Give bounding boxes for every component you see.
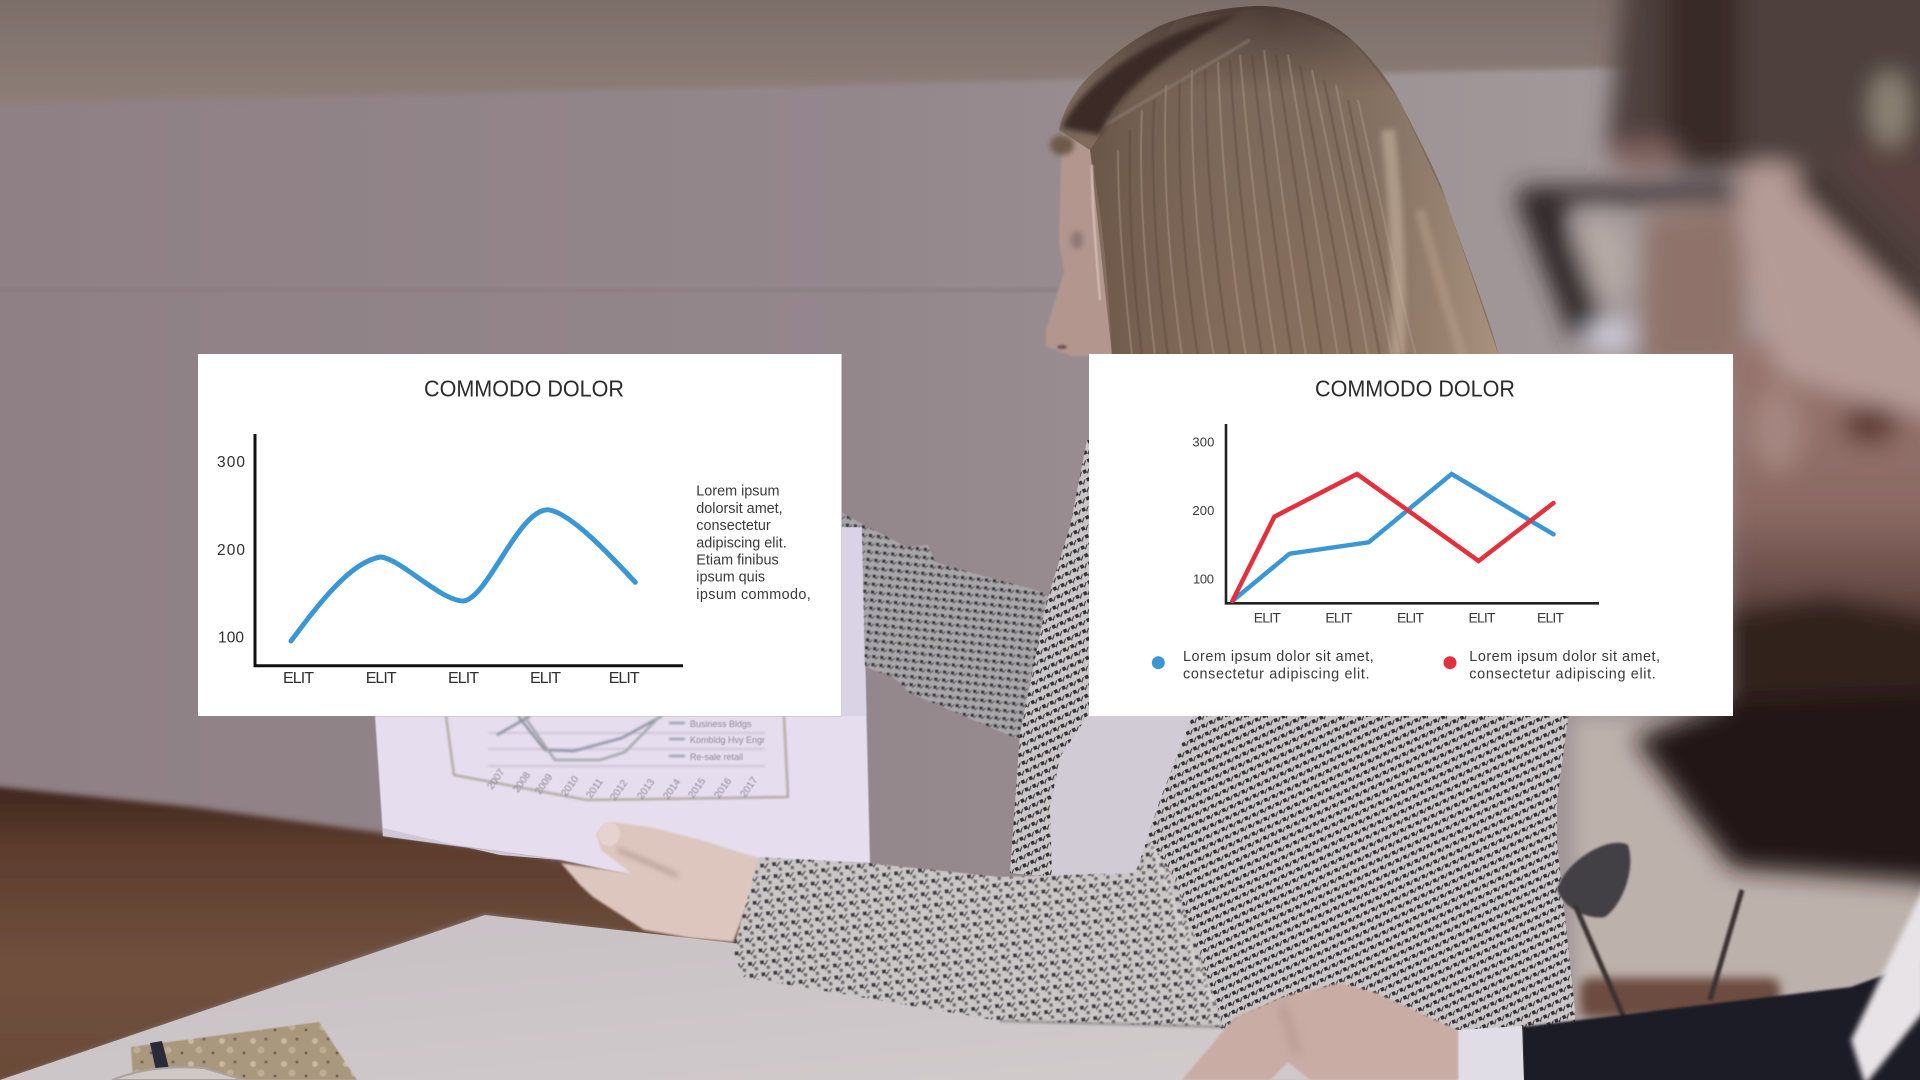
x axis labels: ELIT <box>530 670 561 687</box>
notebook <box>112 1022 357 1080</box>
woman's hand <box>561 822 765 942</box>
woman's white shirt <box>1050 712 1200 882</box>
blue line series <box>1232 474 1554 601</box>
x axis labels: ELIT <box>366 670 397 687</box>
hair parting <box>1105 40 1250 125</box>
paper chart legend <box>690 719 765 762</box>
description text: consectetur <box>696 518 771 534</box>
glasses frame <box>1520 192 1740 196</box>
man's shirt collar <box>1851 885 1920 1080</box>
legend: blue: consectetur adipiscing elit. <box>1183 667 1370 683</box>
man's hand <box>1182 983 1458 1080</box>
x axis labels: ELIT <box>609 670 640 687</box>
blonde highlight <box>1388 130 1399 356</box>
legend: red: consectetur adipiscing elit. <box>1469 667 1656 683</box>
blue smooth line <box>291 510 635 641</box>
description text <box>696 484 811 603</box>
paper chart legend: Business Bldgs <box>690 719 752 729</box>
glasses arm <box>1800 178 1920 340</box>
wooden sideboard <box>0 786 760 1080</box>
paper document <box>375 527 870 875</box>
y axis labels: 200 <box>217 542 245 559</box>
wall seam <box>0 288 1100 292</box>
woman's jacket: body <box>1141 712 1575 1030</box>
paper chart years: 2016 <box>712 776 734 801</box>
woman's jacket: upper arm <box>842 513 1060 745</box>
x axis labels: ELIT <box>283 670 314 687</box>
man's blurred head <box>1515 0 1920 885</box>
legend: blue <box>1152 649 1374 683</box>
legend: blue: Lorem ipsum dolor sit amet, <box>1183 649 1374 665</box>
x axis labels: ELIT <box>448 670 479 687</box>
dark crown <box>1062 12 1240 135</box>
x axis labels <box>283 670 640 687</box>
ear <box>1738 162 1920 420</box>
paper chart years: 2011 <box>584 776 606 801</box>
hair curl <box>1050 135 1074 155</box>
man's hair <box>1607 0 1920 320</box>
woman's hair <box>1050 6 1499 356</box>
man's eye area skin <box>1640 205 1745 370</box>
y axis labels: 300 <box>1192 434 1214 449</box>
glasses reflection <box>1586 320 1634 350</box>
man's beard <box>1680 595 1920 885</box>
x axis labels: ELIT <box>1254 609 1281 625</box>
hair above arm <box>1830 150 1920 280</box>
description text: adipiscing elit. <box>696 535 787 551</box>
description text: ipsum commodo, <box>696 587 811 603</box>
dark strands <box>1130 55 1402 356</box>
panel: left line chart <box>198 354 842 716</box>
hair highlight <box>1870 71 1910 147</box>
description text: ipsum quis <box>696 570 765 586</box>
man's cuff <box>1458 1026 1524 1080</box>
lens interior <box>1566 216 1630 308</box>
hair dark core <box>1665 0 1740 160</box>
chart axes <box>1226 424 1599 603</box>
paper chart years: 2007 <box>485 767 507 792</box>
paper chart years: 2017 <box>738 775 760 800</box>
description text: dolorsit amet, <box>696 501 783 517</box>
x axis labels <box>1254 609 1564 625</box>
paper chart years: 2010 <box>559 774 581 799</box>
light wall behind man <box>1575 720 1920 1020</box>
chart axes <box>255 434 683 666</box>
heading: COMMODO DOLOR <box>424 376 624 402</box>
red line series <box>1232 474 1554 601</box>
woman's face <box>1046 130 1130 356</box>
paper chart years: 2009 <box>533 772 555 797</box>
cheek highlight <box>1751 388 1803 472</box>
y axis labels: 100 <box>1193 572 1214 587</box>
panel: right comparison chart <box>1089 354 1733 716</box>
y axis labels <box>1192 434 1214 587</box>
man's dark suit <box>1522 960 1920 1080</box>
upper wall band <box>0 0 1920 104</box>
x axis labels: ELIT <box>1325 609 1353 625</box>
description text: Etiam finibus <box>696 552 779 568</box>
beard dark core <box>1634 690 1920 878</box>
printed chart on paper <box>446 716 788 800</box>
x axis labels: ELIT <box>1468 609 1496 625</box>
x axis labels: ELIT <box>1397 609 1424 625</box>
table <box>0 915 1600 1080</box>
paper chart years: 2008 <box>511 770 533 795</box>
woman's jacket: lapel <box>1010 440 1090 877</box>
lamp behind man <box>1557 843 1742 1020</box>
description text: Lorem ipsum <box>696 484 779 500</box>
y axis labels: 100 <box>218 630 244 647</box>
wood behind man <box>1580 978 1780 1018</box>
paper chart legend: Re-sale retail <box>690 752 743 762</box>
glasses rim <box>1515 195 1608 340</box>
paper chart years: 2015 <box>686 776 708 801</box>
paper chart years: 2013 <box>635 777 657 802</box>
paper chart legend: Kombldg Hvy Engr <box>690 735 765 745</box>
side shading <box>1090 7 1499 356</box>
cheek shadow <box>1842 405 1898 445</box>
man's cheek <box>1725 340 1920 620</box>
legend: red: Lorem ipsum dolor sit amet, <box>1469 649 1660 665</box>
heading: COMMODO DOLOR <box>1315 376 1515 402</box>
x axis labels: ELIT <box>1537 609 1564 625</box>
woman's jacket: sleeve <box>733 840 1223 1027</box>
reddish temple <box>1609 139 1681 171</box>
y axis labels: 200 <box>1192 503 1214 518</box>
paper chart years <box>485 767 760 803</box>
legend: red <box>1444 649 1660 683</box>
light strands <box>1118 50 1416 356</box>
paper chart years: 2014 <box>661 777 683 802</box>
y axis labels <box>217 454 245 647</box>
paper chart years: 2012 <box>608 778 630 803</box>
y axis labels: 300 <box>217 454 245 471</box>
